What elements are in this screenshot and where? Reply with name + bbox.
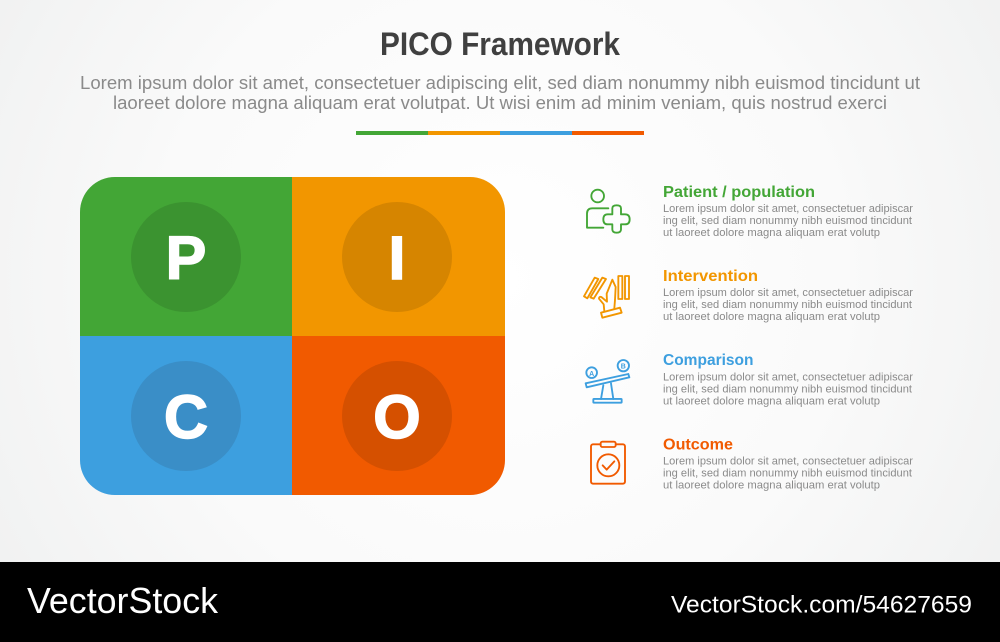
text block: Patient / population: Patient / population [663, 184, 815, 201]
text block: Intervention [663, 268, 913, 323]
footer logo text: VectorStock [27, 580, 219, 621]
text block: Intervention: Lorem ipsum dolor sit amet, consectetuer adipiscar [663, 287, 913, 299]
text block: Patient / population: Lorem ipsum dolor sit amet, consectetuer adipiscar [663, 203, 913, 215]
icon: comparison seesaw A B [586, 360, 629, 403]
quadrant: P: P [166, 224, 206, 292]
text block: Outcome [663, 436, 913, 492]
subtitle text block [80, 73, 920, 113]
icon: intervention hand with dominoes [584, 276, 629, 318]
text block: Intervention: ing elit, sed diam nonummy nibh euismod tincidunt [663, 299, 912, 311]
text block: Patient / population: ut laoreet dolore magna aliquam erat volutp [663, 227, 880, 239]
text block: Comparison: ing elit, sed diam nonummy nibh euismod tincidunt [663, 384, 912, 396]
text block: Patient / population: ing elit, sed diam nonummy nibh euismod tincidunt [663, 215, 912, 227]
text block: Intervention: ut laoreet dolore magna aliquam erat volutp [663, 311, 880, 323]
panel: PICO matrix [80, 177, 505, 495]
quadrant: O: O [373, 383, 421, 451]
text block: Outcome: Lorem ipsum dolor sit amet, consectetuer adipiscar [663, 456, 913, 468]
text block: Comparison [663, 352, 913, 408]
icon: outcome clipboard with check [591, 442, 625, 484]
text block: Patient / population [663, 184, 913, 239]
quadrant: I: I [389, 224, 405, 292]
subtitle text block: laoreet dolore magna aliquam erat volutpat. Ut wisi enim ad minim veniam, quis nostrud exerci [113, 93, 887, 113]
footer url text: VectorStock.com/54627659 [671, 592, 972, 618]
text block: Intervention: Intervention [663, 268, 758, 285]
icon: comparison seesaw A B: A [589, 371, 594, 378]
icon: patient with medical cross [587, 190, 630, 233]
icon: comparison seesaw A B: B [621, 364, 626, 370]
text block: Comparison: ut laoreet dolore magna aliquam erat volutp [663, 396, 880, 408]
quadrant: C [131, 361, 241, 471]
subtitle text block: Lorem ipsum dolor sit amet, consectetuer adipiscing elit, sed diam nonummy nibh euismod tincidunt ut [80, 73, 920, 93]
text block: Comparison: Comparison [663, 352, 754, 369]
quadrant: P [131, 202, 241, 312]
colour divider bar [356, 131, 644, 135]
text block: Outcome: ut laoreet dolore magna aliquam erat volutp [663, 480, 880, 492]
quadrant: C: C [164, 383, 208, 451]
text block: Outcome: ing elit, sed diam nonummy nibh euismod tincidunt [663, 468, 912, 480]
quadrant: O [342, 361, 452, 471]
text block: Comparison: Lorem ipsum dolor sit amet, consectetuer adipiscar [663, 372, 913, 384]
title: PICO Framework [380, 26, 620, 62]
quadrant: I [342, 202, 452, 312]
text block: Outcome: Outcome [663, 436, 733, 454]
footer bar [0, 562, 1000, 642]
